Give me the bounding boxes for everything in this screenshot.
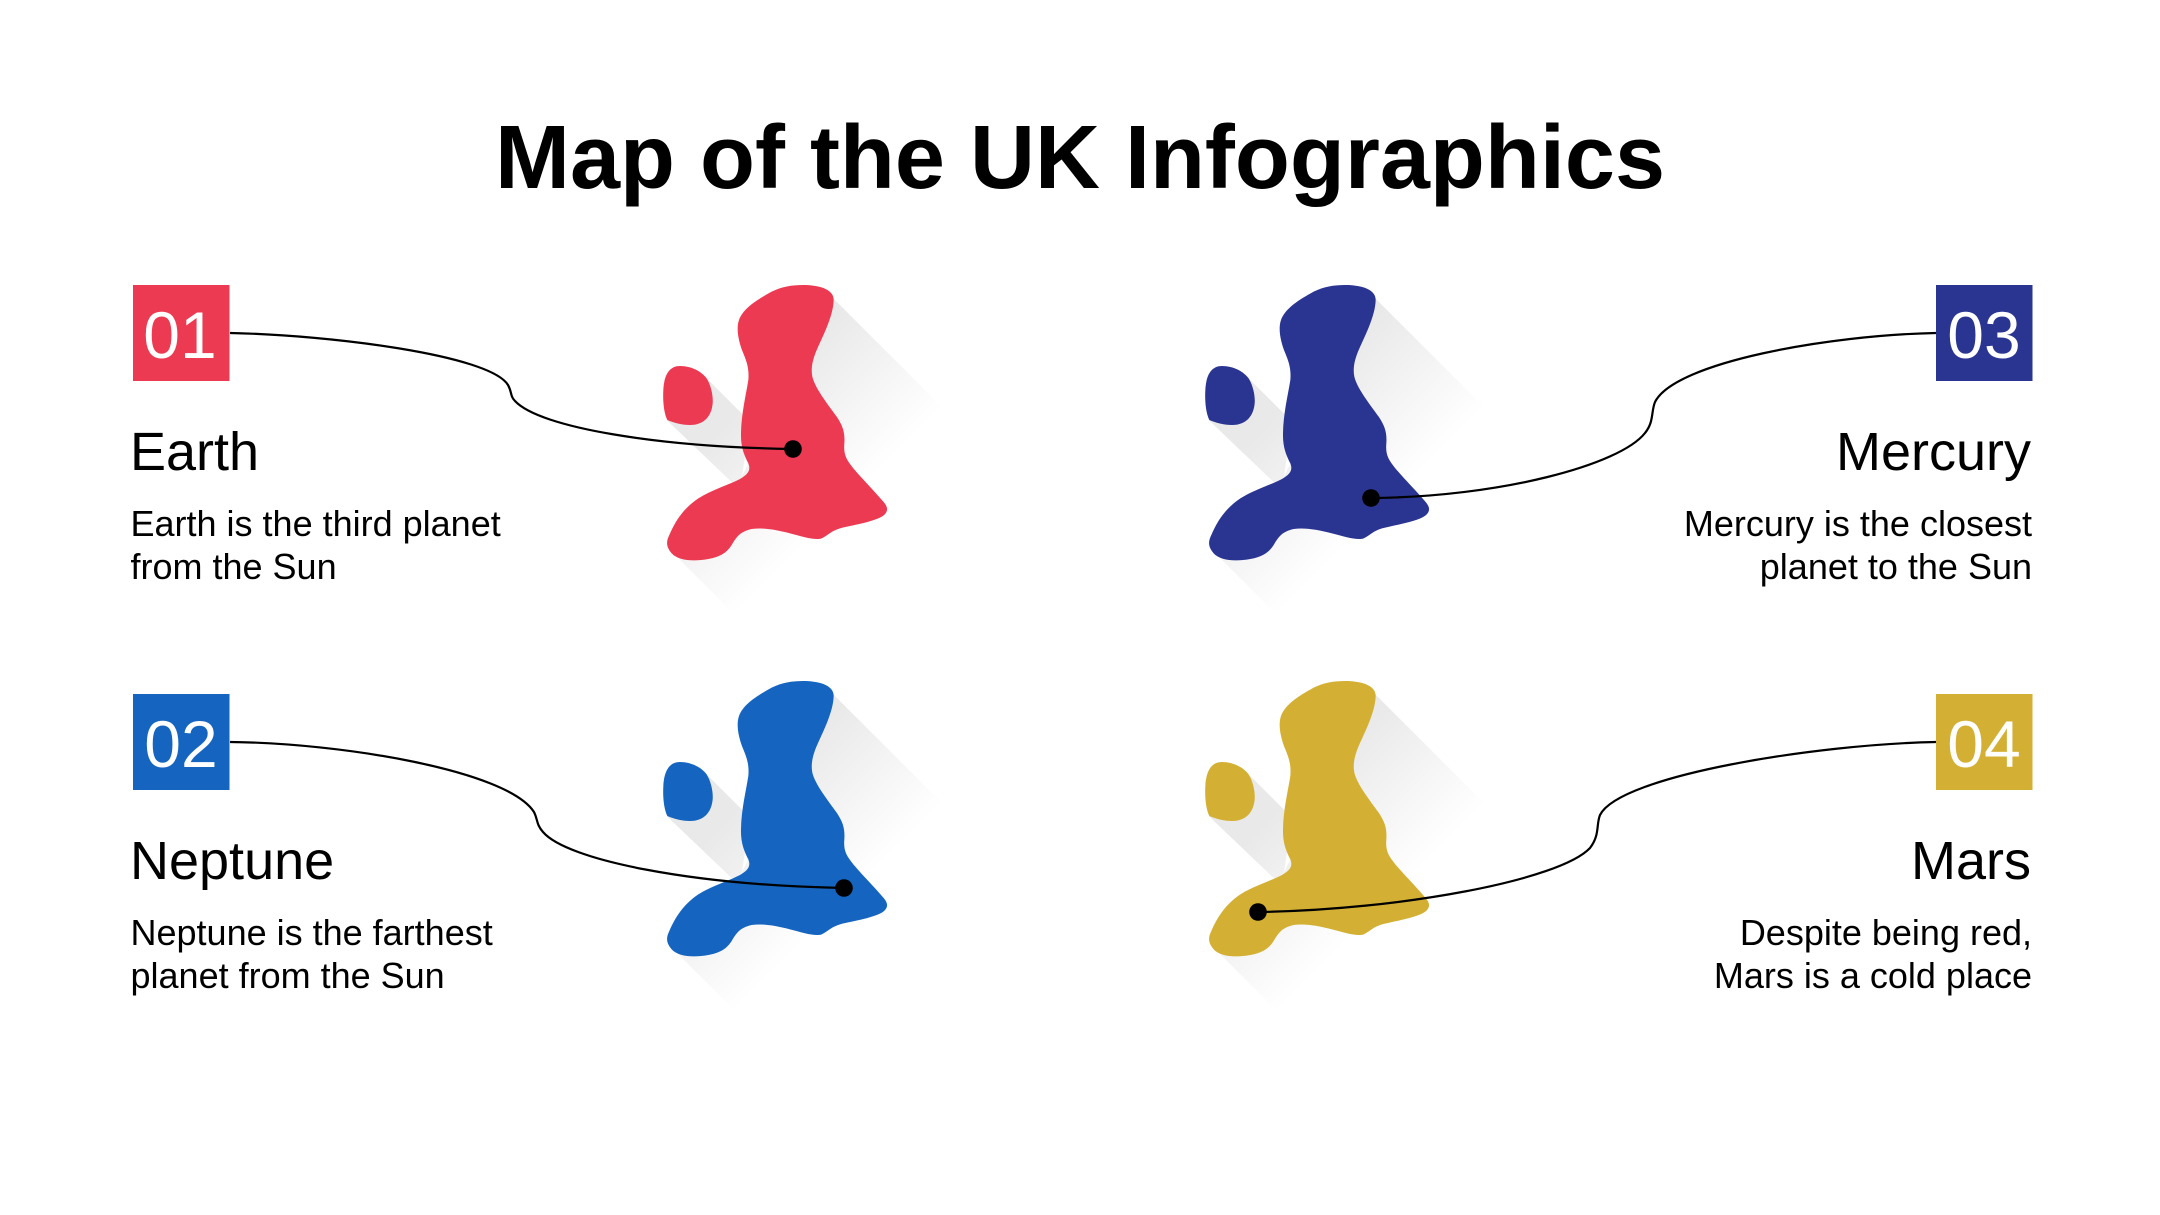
panel: 04 Mars [1205, 681, 2032, 1103]
number box 03 [1936, 285, 2032, 381]
connector line 04 [1258, 742, 1936, 912]
description: Neptune: Neptune is the farthest [130, 912, 493, 953]
connector line 01 [230, 333, 793, 449]
location dot 04 [1249, 903, 1267, 921]
number box 03: 03 [1947, 298, 2021, 372]
map: Earth [663, 285, 1007, 707]
panel: 03 Mercury [1205, 285, 2032, 707]
panel: 02 Neptune [130, 681, 1007, 1103]
number box 04: 04 [1947, 707, 2021, 781]
description: Mars: Despite being red, [1740, 912, 2032, 953]
map: Mercury [1205, 285, 1549, 707]
heading: Earth: Earth [130, 422, 259, 482]
heading: Mercury: Mercury [1836, 422, 2031, 482]
number box 02: 02 [144, 707, 218, 781]
number box 01: 01 [143, 298, 217, 372]
description: Mercury: planet to the Sun [1760, 546, 2032, 587]
title: Map of the UK Infographics [495, 108, 1665, 208]
description: Earth: Earth is the third planet [130, 503, 501, 544]
description: Earth: from the Sun [130, 546, 337, 587]
map: Neptune [663, 681, 1007, 1103]
description: Mercury: Mercury is the closest [1684, 503, 2032, 544]
heading: Neptune: Neptune [130, 831, 334, 891]
description: Mars: Mars is a cold place [1714, 955, 2032, 996]
location dot 03 [1362, 489, 1380, 507]
number box 04 [1936, 694, 2032, 790]
connector line 02 [230, 742, 844, 888]
heading: Mars: Mars [1911, 831, 2031, 891]
number box 02 [133, 694, 230, 790]
number box 01 [133, 285, 230, 381]
connector line 03 [1371, 333, 1936, 498]
description: Neptune: planet from the Sun [130, 955, 445, 996]
map: Mars [1205, 681, 1549, 1103]
location dot 02 [835, 879, 853, 897]
panel: 01 Earth [130, 285, 1007, 707]
location dot 01 [784, 440, 802, 458]
